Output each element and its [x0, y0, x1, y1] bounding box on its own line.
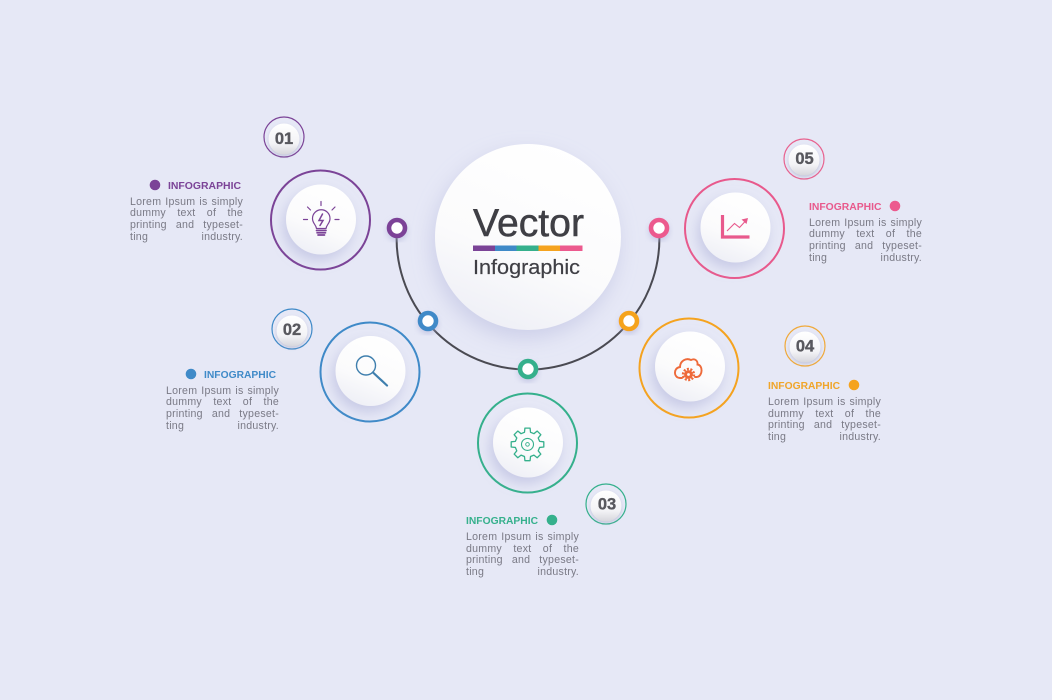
panel: step 02 [166, 309, 420, 434]
ring 05 [685, 179, 784, 278]
disc 04 [655, 332, 725, 402]
ring 01 [271, 170, 370, 270]
connecting arc with nodes [389, 220, 667, 377]
badge 04 [785, 326, 825, 366]
panel: step 01 [130, 117, 370, 270]
badge 03 [586, 484, 626, 524]
badge 02: 02 [283, 321, 301, 339]
text block 03 [466, 532, 579, 580]
heading 04: INFOGRAPHIC [768, 380, 840, 392]
text block 02 [166, 386, 279, 434]
text block 03: dummy text of the [466, 543, 579, 555]
badge 03: 03 [598, 496, 616, 514]
title: Vector: Vector [473, 202, 584, 245]
panel: step 04 [640, 318, 881, 445]
text block 01 [130, 196, 243, 244]
disc 02 [336, 336, 406, 406]
heading 03: INFOGRAPHIC [466, 515, 538, 527]
panel: step 05 [685, 139, 922, 278]
subtitle: Infographic: Infographic [473, 256, 580, 279]
ring 03 [478, 394, 577, 492]
icon: gear [511, 428, 544, 461]
icon: light bulb [304, 202, 339, 235]
ring 04 [640, 318, 738, 418]
heading 01: INFOGRAPHIC [168, 180, 241, 192]
text block 01: dummy text of the [130, 207, 243, 219]
badge 04: 04 [796, 338, 815, 356]
badge 05: 05 [795, 150, 814, 168]
heading 02: INFOGRAPHIC [204, 369, 276, 381]
ring 02 [320, 322, 420, 422]
text block 02: dummy text of the [166, 396, 279, 408]
text block 01: printing and typeset- [130, 219, 243, 231]
text block 05: dummy text of the [809, 228, 922, 240]
icon: cloud with gear [675, 359, 702, 380]
heading 05: INFOGRAPHIC [809, 201, 882, 213]
colour bar [473, 246, 582, 251]
text block 02: printing and typeset- [166, 408, 279, 420]
disc 01 [286, 184, 356, 254]
icon: magnifier [356, 356, 387, 386]
disc 05 [700, 192, 770, 262]
panel: step 03 [466, 394, 626, 580]
icon: line chart [722, 215, 750, 237]
text block 04: ting industry. [768, 431, 881, 443]
text block 02: ting industry. [166, 420, 279, 432]
badge 01 [264, 117, 304, 157]
badge 02 [272, 309, 312, 349]
text block 04: dummy text of the [768, 408, 881, 420]
text block 05 [809, 218, 922, 266]
disc 03 [493, 408, 563, 478]
text block 04 [768, 397, 881, 445]
text block 01: ting industry. [130, 231, 243, 243]
text block 05: ting industry. [809, 252, 922, 264]
text block 04: printing and typeset- [768, 419, 881, 431]
text block 03: ting industry. [466, 566, 579, 578]
text block 05: printing and typeset- [809, 240, 922, 252]
badge 05 [784, 139, 824, 179]
text block 03: printing and typeset- [466, 554, 579, 566]
badge 01: 01 [275, 130, 293, 148]
central title circle [435, 144, 621, 330]
